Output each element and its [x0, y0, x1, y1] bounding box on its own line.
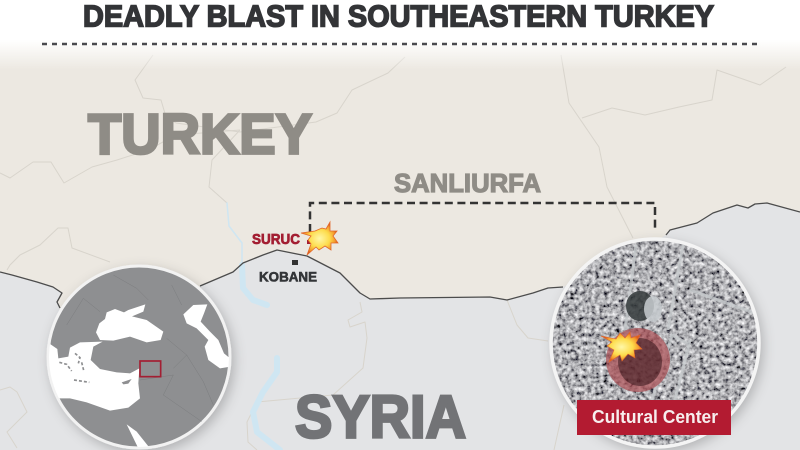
- map: Turkey territory: [0, 0, 800, 310]
- title divider: [42, 43, 757, 45]
- Sanliurfa dashed bracket: [310, 203, 655, 232]
- highlight: cultural center site: [606, 328, 670, 392]
- marker: Suruc: [252, 232, 314, 248]
- country lines: [67, 275, 213, 425]
- label: Sanliurfa: SANLIURFA: [394, 168, 541, 198]
- label: Kobane: KOBANE: [259, 268, 317, 284]
- label: Syria: SYRIA: [295, 384, 466, 450]
- Aegean islands: [59, 353, 89, 382]
- icon: blast at cultural center: [601, 332, 642, 362]
- label box: Cultural Center: Cultural Center: [592, 407, 718, 427]
- sea: Black Sea: [96, 304, 163, 342]
- label box: Cultural Center: [577, 400, 731, 435]
- rivers: [227, 203, 280, 450]
- sea: Red Sea: [126, 424, 148, 447]
- locator box: [140, 361, 161, 377]
- satellite photo circle: [550, 238, 760, 448]
- marker: Kobane: [259, 260, 317, 284]
- island: Cyprus: [122, 379, 132, 384]
- locator globe: [47, 266, 230, 448]
- sea: Mediterranean and Aegean: [47, 342, 140, 411]
- satellite imagery texture: [550, 238, 760, 448]
- top white fade: [0, 0, 800, 70]
- label: Turkey: TURKEY: [88, 103, 312, 167]
- sea: Caspian: [183, 304, 230, 368]
- border: Turkey–Syria: [0, 203, 800, 308]
- label: Suruc: SURUC: [252, 232, 300, 248]
- street grid: [550, 238, 760, 448]
- roads: [625, 245, 760, 400]
- dark park area: [626, 291, 654, 321]
- icon: blast at Suruc: [301, 222, 338, 255]
